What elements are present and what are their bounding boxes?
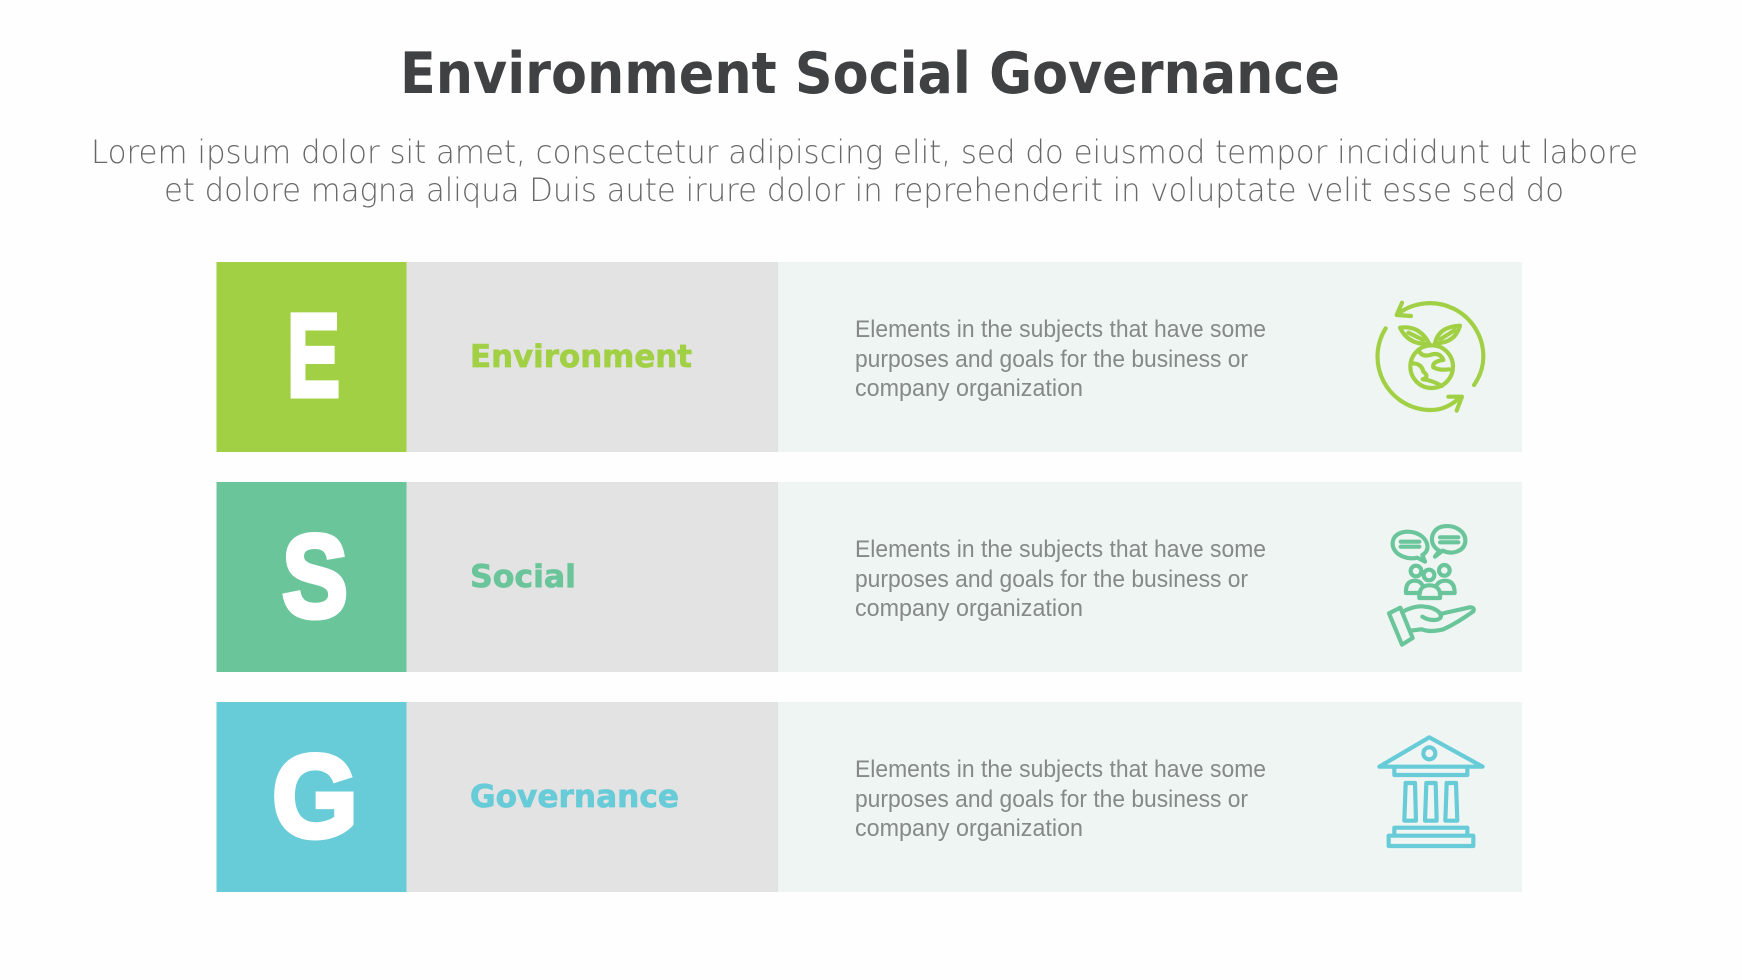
subtitle text: Lorem ipsum dolor sit amet, consectetur adipiscing elit, sed do eiusmod tempor incididunt ut labore [91,133,1638,171]
governance heading: Governance [470,779,679,815]
title: Environment Social Governance [400,41,1340,107]
panel: environment row [216,262,1522,452]
social description panel [778,482,1522,672]
social description: purposes and goals for the business or [855,566,1248,593]
letter S: S [282,511,348,643]
social description: company organization [855,595,1083,622]
icon: government building with columns [1379,737,1483,846]
social label panel [406,482,778,672]
environment description: purposes and goals for the business or [855,346,1248,373]
icon: globe with sprout and recycling arrows [1378,303,1483,411]
environment label panel [406,262,778,452]
governance description: purposes and goals for the business or [855,786,1248,813]
governance description [855,756,1266,842]
governance description panel [778,702,1522,892]
governance letter block [216,702,406,892]
letter G: G [272,731,358,863]
environment description: Elements in the subjects that have some [855,316,1266,343]
letter E: E [287,290,340,422]
governance description: Elements in the subjects that have some [855,756,1266,783]
panel: governance row [216,702,1522,892]
environment description panel [778,262,1522,452]
social description [855,536,1266,622]
governance description: company organization [855,815,1083,842]
governance label panel [406,702,778,892]
social letter block [216,482,406,672]
environment description [855,316,1266,402]
subtitle text: et dolore magna aliqua Duis aute irure dolor in reprehenderit in voluptate velit esse sed do [164,171,1564,209]
environment heading: Environment [470,339,692,375]
icon: hand holding people and speech bubbles [1389,526,1474,645]
social description: Elements in the subjects that have some [855,536,1266,563]
subtitle text [91,133,1638,209]
environment letter block [216,262,406,452]
panel: social row [216,482,1522,672]
environment description: company organization [855,375,1083,402]
social heading: Social [470,559,576,595]
